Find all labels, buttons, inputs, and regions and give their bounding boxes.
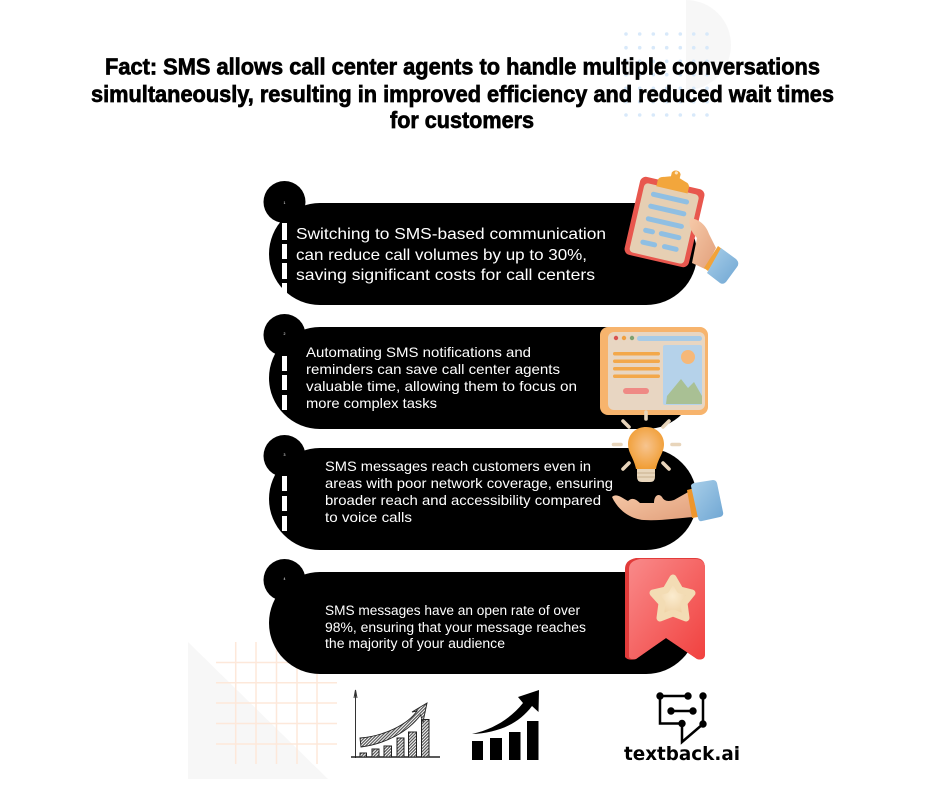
dashed divider 3	[282, 476, 287, 531]
pill 3 background	[269, 448, 697, 550]
step 4 text: SMS messages have an open rate of over	[325, 603, 580, 618]
icon: light bulb on hand	[612, 412, 723, 521]
title: simultaneously, resulting in improved efficiency and reduced wait times	[91, 81, 834, 107]
pill 4 background	[269, 572, 697, 674]
panel: step 4	[264, 559, 697, 674]
step 1 text	[296, 226, 606, 284]
logo: textback.ai	[624, 692, 740, 765]
step 3 text: areas with poor network coverage, ensuring	[325, 475, 613, 491]
step 1 text: can reduce call volumes by up to 30%,	[296, 247, 587, 264]
icon: solid growth chart	[472, 690, 539, 760]
number badge 3: 3	[284, 453, 286, 457]
icon: sketched growth chart	[351, 690, 440, 758]
step 4 text	[325, 603, 586, 651]
title: Fact: SMS allows call center agents to handle multiple conversations	[105, 54, 820, 80]
step 2 text: reminders can save call center agents	[306, 361, 560, 377]
number badge 1	[264, 181, 306, 223]
logo wordmark: textback.ai	[624, 743, 740, 765]
step 4 text: the majority of your audience	[325, 636, 505, 651]
step 2 text: more complex tasks	[306, 395, 437, 411]
step 3 text: SMS messages reach customers even in	[325, 458, 591, 474]
icon: clipboard with hand	[623, 163, 738, 284]
logo mark	[660, 696, 703, 742]
decorative half circle top right	[686, 0, 731, 90]
number badge 1: 1	[284, 201, 286, 205]
open hand	[612, 491, 693, 520]
step 2 text	[306, 344, 577, 411]
bulb rays	[614, 412, 680, 469]
dashed divider 1	[282, 223, 287, 295]
dashed divider 2	[282, 356, 287, 410]
panel: step 2	[264, 314, 697, 429]
pill 2 background	[269, 327, 697, 429]
number badge 2: 2	[284, 332, 286, 336]
panel: step 1	[264, 181, 697, 305]
step 2 text: Automating SMS notifications and	[306, 344, 531, 360]
step 3 text: broader reach and accessibility compared	[325, 492, 601, 508]
step 2 text: valuable time, allowing them to focus on	[306, 378, 577, 394]
pill 1 background	[269, 203, 697, 305]
step 1 text: Switching to SMS-based communication	[296, 226, 606, 243]
step 4 text: 98%, ensuring that your message reaches	[325, 620, 586, 635]
decorative peach grid	[216, 642, 337, 764]
step 3 text	[325, 458, 613, 525]
decorative triangle bottom left	[188, 642, 328, 779]
number badge 4: 4	[284, 577, 286, 581]
icon: bookmark with star	[625, 558, 705, 660]
panel: step 3	[264, 435, 697, 550]
number badge 2	[264, 314, 306, 356]
step 3 text: to voice calls	[325, 509, 412, 525]
title: for customers	[390, 107, 534, 133]
bulb	[628, 427, 664, 469]
number badge 4	[264, 559, 306, 601]
number badge 3	[264, 435, 306, 477]
title	[91, 54, 834, 133]
decorative dot grid	[624, 32, 709, 117]
icon: browser window	[600, 327, 708, 415]
step 1 text: saving significant costs for call centers	[296, 267, 595, 284]
